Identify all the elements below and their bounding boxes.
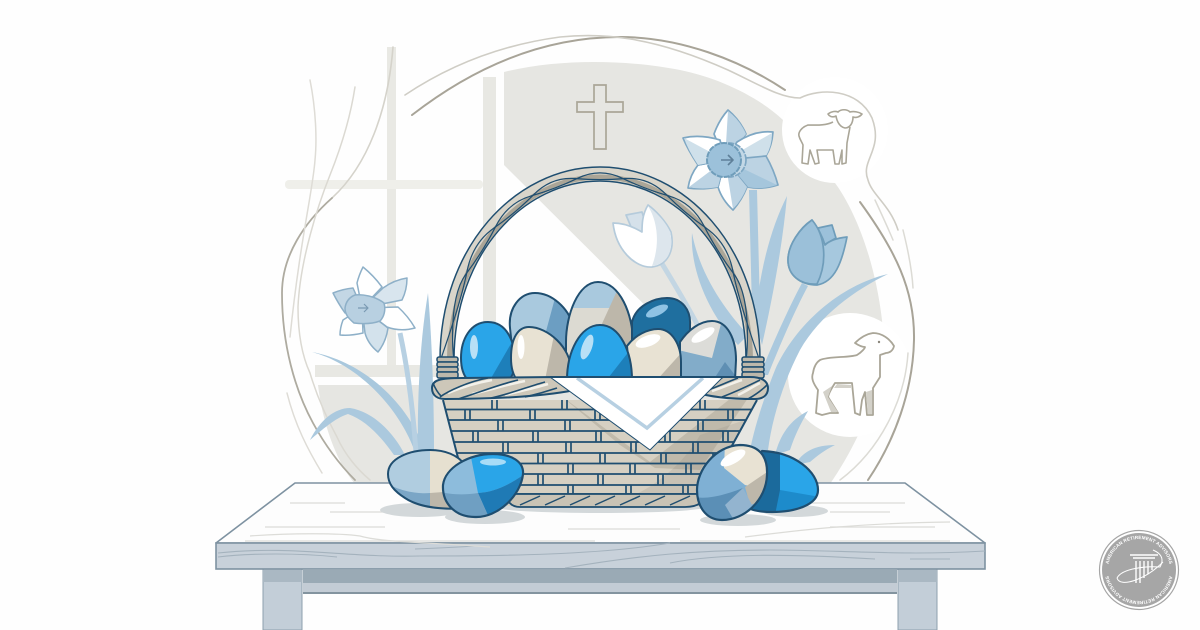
petal bottom [718, 160, 747, 210]
egg: light blue and cream [387, 449, 462, 510]
flower stem: white tulip [661, 262, 700, 330]
egg: front cream right [626, 328, 682, 376]
napkin [550, 377, 723, 450]
basket body weave [440, 395, 760, 506]
flower: right daffodil [683, 110, 778, 210]
icon: cross [577, 85, 623, 149]
leaves: left side [310, 293, 434, 455]
table legs [263, 568, 937, 630]
window frame [285, 47, 496, 387]
flower: left daffodil [333, 267, 415, 352]
logo text: AMERICAN RETIREMENT ADVISORS [1106, 536, 1172, 564]
basket rim [432, 377, 768, 399]
petal lower right [725, 156, 778, 188]
egg: bright blue [750, 450, 820, 514]
basket bottom rim [505, 494, 705, 507]
logo column emblem [1117, 550, 1163, 583]
daffodil trumpet [707, 143, 746, 177]
egg: front bright blue centre [566, 324, 633, 376]
basket [432, 173, 768, 507]
petal upper right [725, 132, 773, 160]
easter eggs on table left [385, 448, 530, 520]
icon: small lamb [799, 110, 862, 164]
egg: back centre banded [565, 281, 632, 356]
handle [440, 173, 760, 360]
outline swooshes [282, 36, 914, 480]
egg: front bright blue left [460, 321, 514, 377]
table front edge [216, 543, 985, 569]
flower: blue tulip [788, 220, 847, 285]
egg: cream and blue [695, 443, 770, 525]
easter eggs in basket [460, 281, 737, 377]
icon: large lamb [812, 333, 894, 415]
egg: front grey and blue [679, 320, 737, 376]
table top [216, 483, 985, 543]
logo text lower: AMERICAN RETIREMENT ADVISORS [1106, 576, 1172, 604]
petal upper left [683, 136, 725, 165]
egg: back left light blue [508, 292, 569, 348]
leaves: right side [692, 190, 888, 465]
egg: blue quartered [442, 454, 524, 518]
logo badge [1098, 530, 1180, 610]
backdrop: grey church wall shape [318, 62, 912, 484]
easter eggs on table right [695, 443, 820, 525]
handle collars [437, 357, 764, 378]
flower: white tulip [613, 205, 672, 267]
egg: front cream left [510, 326, 570, 376]
petal top [714, 110, 746, 160]
table [216, 483, 985, 630]
petal lower left [688, 160, 725, 189]
egg: back dark blue [632, 298, 690, 375]
egg shadows on table [380, 501, 828, 526]
